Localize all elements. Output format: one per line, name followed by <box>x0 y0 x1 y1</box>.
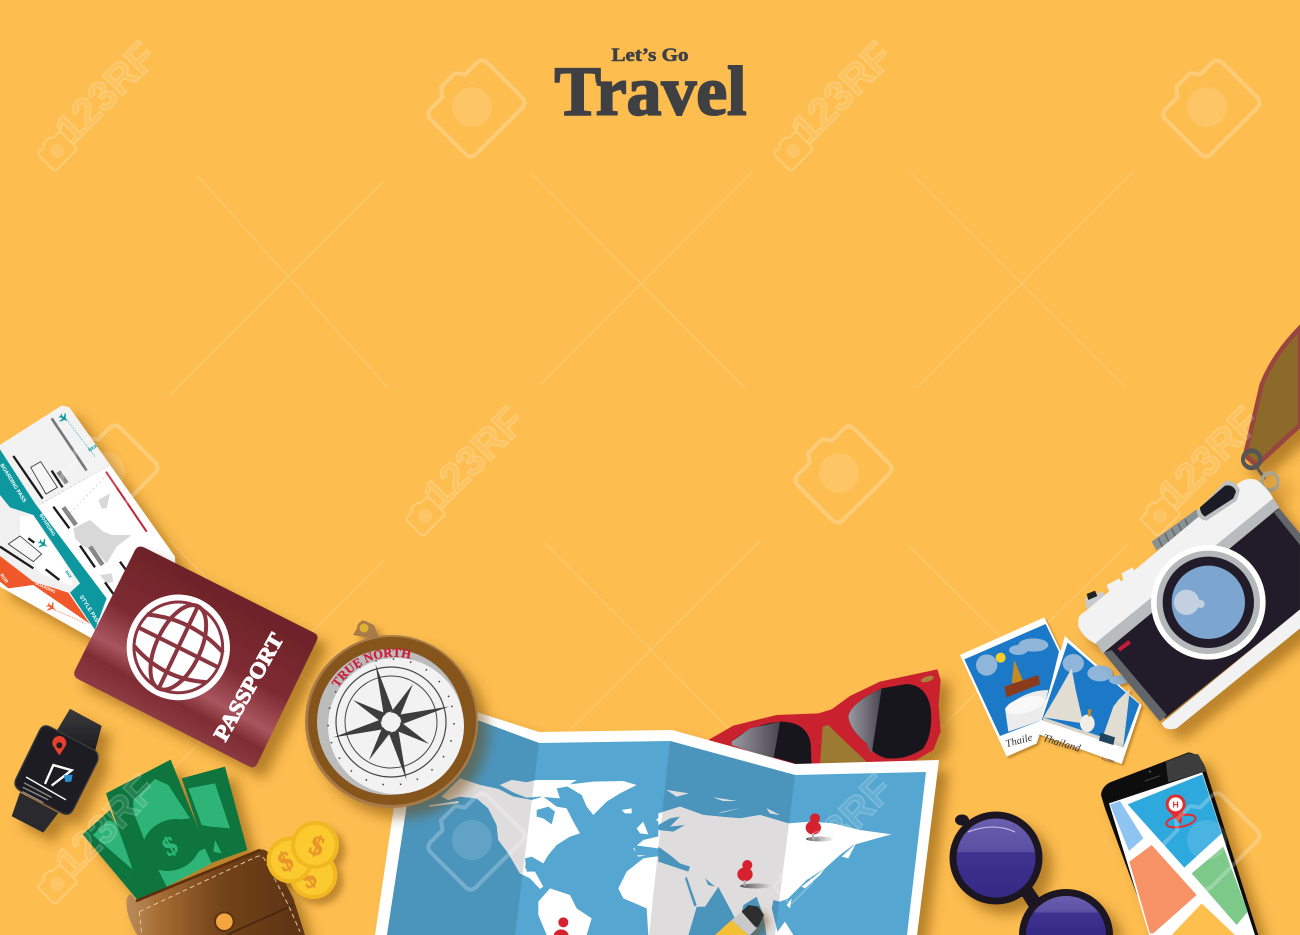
red pin: Russia <box>806 813 821 839</box>
watermark: 123RF text: 123RF <box>46 766 165 885</box>
banknotes and wallet <box>83 760 305 935</box>
compass <box>305 620 496 826</box>
bridge <box>1020 884 1043 912</box>
speaker <box>1145 776 1160 781</box>
film dial <box>1152 509 1199 551</box>
temple rivet <box>920 674 934 684</box>
map block blue <box>1128 774 1222 868</box>
photo 2 <box>1037 636 1142 764</box>
continents in shaded central fold <box>649 790 789 935</box>
ticket labels: BOARDING <box>38 513 57 537</box>
faint diagonal lines pattern <box>167 172 1133 775</box>
wallet opening <box>136 850 260 901</box>
camera lens <box>1151 545 1266 660</box>
route icon <box>45 765 72 786</box>
wallet body <box>126 849 305 935</box>
sun <box>996 653 1006 663</box>
bridge shadow <box>820 725 868 765</box>
second ticket stub <box>0 495 80 593</box>
monument <box>1043 668 1130 747</box>
map block green <box>1192 847 1248 925</box>
camera strap <box>1243 328 1300 490</box>
strap link <box>1257 467 1265 479</box>
pencil <box>715 905 764 935</box>
photo 1 <box>960 617 1065 757</box>
ticket details <box>0 418 147 623</box>
phone glare <box>1166 753 1207 782</box>
strap leather <box>1245 328 1300 465</box>
compass loop <box>353 620 380 640</box>
watermark: 123RF text: 123RF <box>782 33 901 152</box>
watermark: 123RF text: 123RF <box>414 398 533 517</box>
red pin: South America <box>554 917 569 935</box>
right lens dark <box>848 684 931 759</box>
map ocean <box>387 700 926 935</box>
orange strip <box>0 556 90 624</box>
ticket labels: BKK <box>64 569 73 579</box>
golden mount <box>1012 660 1023 683</box>
watermark: small icons <box>35 129 1181 905</box>
compass case <box>305 635 478 808</box>
title line: Travel: Travel <box>554 54 746 130</box>
polaroid photos <box>960 617 1142 764</box>
continents <box>428 778 892 935</box>
strap clip <box>1243 451 1260 468</box>
watch body <box>15 726 98 814</box>
folded world map <box>375 691 939 935</box>
compass face <box>317 649 463 795</box>
pencil ferrule <box>732 912 757 935</box>
ticket labels: BOARDING <box>35 580 56 594</box>
flag icon <box>64 775 73 782</box>
ticket body <box>0 406 177 639</box>
dark folds <box>387 700 539 935</box>
strap ring <box>1262 473 1278 490</box>
back banknote <box>182 767 247 863</box>
smartphone <box>1101 752 1258 935</box>
title line: Let's Go: Let’s Go <box>612 46 688 66</box>
plane icons <box>36 411 71 614</box>
map block light blue <box>1110 801 1143 851</box>
watermark: 123RF text: 123RF <box>46 33 165 152</box>
watch straps <box>57 709 102 751</box>
map block orange <box>1129 845 1197 933</box>
left lens reflection <box>732 722 780 760</box>
frame <box>707 669 941 770</box>
map block yellow <box>1172 903 1235 935</box>
photo credit: ©123RF <box>1101 756 1116 764</box>
shutter buttons <box>1107 578 1123 592</box>
boarding pass tickets <box>0 406 177 639</box>
passport cover <box>74 546 318 767</box>
coin 1: $ <box>294 862 322 894</box>
left lens dark <box>732 722 812 768</box>
watermark: 123RF text: 123RF <box>782 766 901 885</box>
ticket labels <box>0 443 102 627</box>
watch text lines <box>26 777 66 800</box>
stitching <box>139 856 300 933</box>
left banknote <box>83 810 147 901</box>
teal strip <box>0 449 107 630</box>
camera top plate <box>1078 479 1273 644</box>
ticket labels: BKK <box>87 443 99 453</box>
seas and bays <box>525 807 715 907</box>
ticket stub top <box>0 406 110 508</box>
red sunglasses <box>707 669 941 770</box>
red indicator <box>1118 640 1131 652</box>
grey trim <box>1096 498 1279 654</box>
clouds <box>976 638 1048 676</box>
camera body <box>1105 508 1300 718</box>
caption: Thailand <box>1041 733 1082 755</box>
right lens reflection <box>848 688 882 754</box>
passport label: PASSPORT <box>209 628 289 745</box>
camera <box>1078 479 1300 729</box>
smart watch <box>12 709 102 833</box>
pencil body <box>715 920 748 935</box>
location pin H: H <box>1173 799 1179 809</box>
phone body <box>1101 752 1258 935</box>
continents in shaded fold <box>428 778 534 875</box>
viewfinder <box>1197 481 1240 521</box>
map paper <box>375 691 939 935</box>
globe icon <box>109 577 247 718</box>
left lens <box>950 812 1042 904</box>
map pin icon <box>52 736 66 756</box>
ticket labels: STYLE PASS <box>78 594 102 627</box>
right lens <box>1019 889 1113 935</box>
world map on ticket <box>73 493 132 583</box>
wallet flap line <box>227 905 293 935</box>
dollar sign: $ <box>157 830 183 862</box>
title <box>554 46 746 130</box>
pencil eraser <box>742 905 764 927</box>
camera base <box>1162 609 1300 729</box>
wallet button <box>214 911 235 932</box>
front banknote <box>106 760 212 900</box>
watermark: 123RF text: 123RF <box>1149 398 1268 517</box>
screen <box>1109 772 1255 935</box>
location pin H <box>1165 794 1197 830</box>
pin shadows <box>740 836 834 888</box>
clouds <box>1063 654 1128 685</box>
round sunglasses <box>950 812 1113 935</box>
coin 3: $ <box>306 829 329 862</box>
caption: Thaile <box>1005 732 1034 750</box>
coin 2: $ <box>273 845 298 878</box>
compass lettering: TRUE NORTH <box>331 648 412 687</box>
temple knob <box>955 814 969 826</box>
compass rose <box>314 645 468 799</box>
passport <box>74 546 318 767</box>
coins <box>267 821 339 899</box>
red pin: Asia <box>737 860 753 886</box>
